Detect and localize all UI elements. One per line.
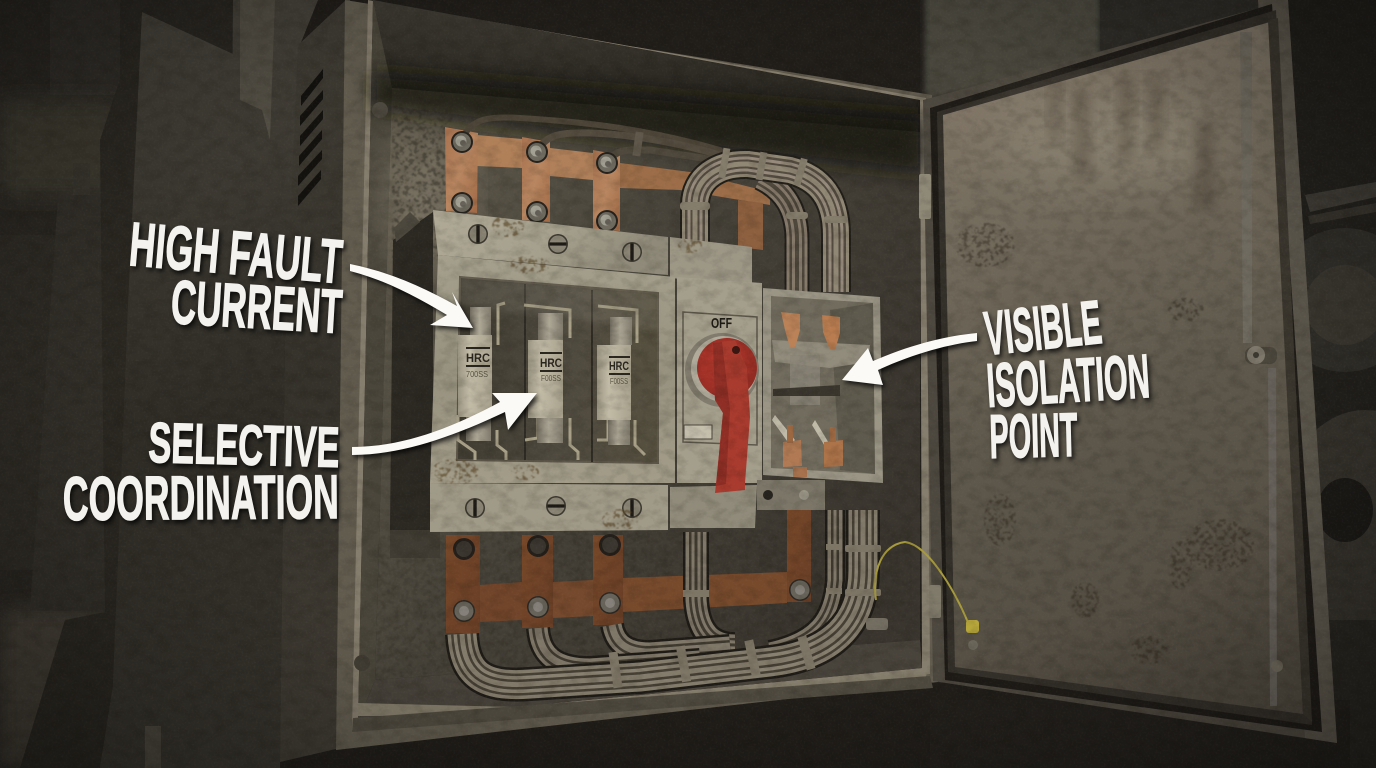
fuse clips bbox=[458, 303, 645, 460]
top busbar bolts bbox=[451, 131, 618, 232]
top cable bundles bbox=[695, 164, 836, 292]
label: visible isolation point: POINT bbox=[989, 401, 1078, 472]
lower copper busbars bbox=[446, 510, 811, 633]
top copper busbars bbox=[445, 127, 770, 250]
clear isolation cover bbox=[763, 288, 883, 483]
label: selective coordination: SELECTIVE bbox=[148, 411, 340, 480]
label: selective coordination bbox=[63, 411, 340, 534]
fuse 3: F00SS bbox=[610, 377, 628, 386]
label: high fault current bbox=[127, 210, 345, 347]
fuse 2: HRC bbox=[540, 356, 562, 370]
fuse 3: HRC bbox=[609, 359, 629, 373]
arrow: visible isolation point bbox=[842, 333, 977, 385]
label: high fault current: CURRENT bbox=[169, 268, 344, 347]
left machinery blocks bbox=[0, 0, 318, 768]
door weathering bbox=[955, 75, 1254, 664]
fuse window bbox=[457, 277, 658, 463]
fuse holder front bbox=[430, 255, 757, 532]
enclosure side wall with vents bbox=[280, 0, 350, 762]
lower cable bundles bbox=[462, 510, 863, 685]
arrow: high fault current bbox=[350, 264, 473, 328]
label: high fault current: HIGH FAULT bbox=[127, 210, 345, 297]
back plate mottling bbox=[375, 90, 920, 680]
breaker side shadow bbox=[390, 212, 440, 558]
lower terminal plate bbox=[757, 480, 825, 510]
breaker rust patches bbox=[431, 215, 702, 531]
earth wire bbox=[866, 542, 979, 650]
label: visible isolation point bbox=[981, 288, 1152, 472]
lower busbar bolts bbox=[453, 534, 811, 622]
illustration: open fused switch enclosure: ISOLATION bbox=[985, 342, 1152, 421]
open door bbox=[923, 0, 1337, 743]
window haze bbox=[460, 277, 658, 330]
fuse 3 bbox=[597, 317, 632, 445]
label: visible isolation point: VISIBLE bbox=[981, 288, 1105, 369]
hinges bbox=[919, 174, 941, 618]
top cables bbox=[462, 117, 720, 163]
label: selective coordination: COORDINATION bbox=[63, 463, 339, 534]
fuse 2: F00SS bbox=[541, 374, 561, 383]
isolator switch module bbox=[677, 277, 762, 483]
fuse 2 bbox=[528, 313, 563, 443]
cable ties bbox=[680, 148, 848, 223]
enclosure body bbox=[336, 0, 938, 750]
fuse 1: HRC bbox=[466, 351, 490, 365]
lower cable ties bbox=[609, 544, 881, 688]
arrow: selective coordination bbox=[352, 393, 537, 455]
fuse holder top plate bbox=[433, 210, 752, 285]
fuse 1 bbox=[458, 307, 492, 441]
mounting studs in back plate bbox=[354, 102, 388, 671]
fuse 1: 700SS bbox=[466, 370, 488, 379]
OFF label: OFF bbox=[711, 315, 732, 332]
rotary handle bbox=[685, 333, 759, 493]
